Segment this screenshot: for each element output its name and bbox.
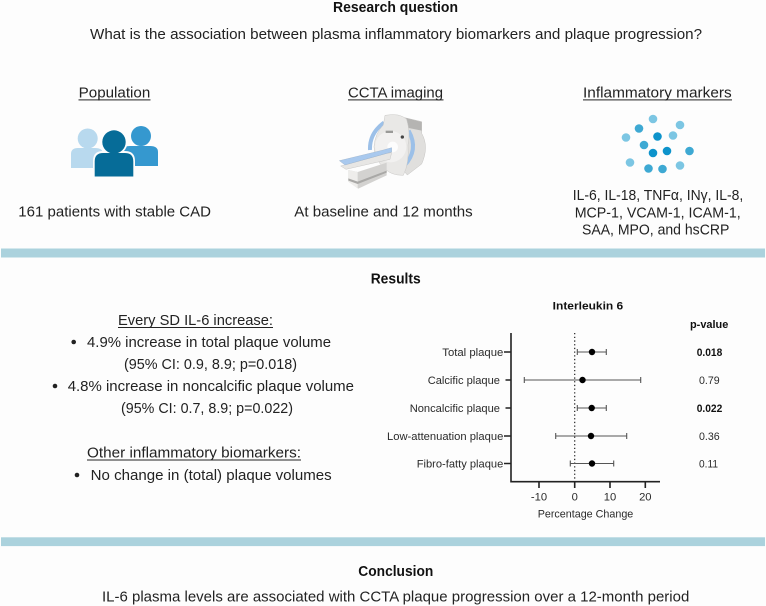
heading: other biomarkers: Other inflammatory biomarkers: xyxy=(87,444,301,462)
row labels: Noncalcific plaque xyxy=(410,403,500,415)
row labels: Calcific plaque xyxy=(428,375,500,387)
p-values: 0.36 xyxy=(699,431,720,443)
icon: molecules xyxy=(622,115,694,173)
zero reference line xyxy=(574,333,576,481)
text: timing: At baseline and 12 months xyxy=(294,204,473,221)
bullet: noncalcific plaque: 4.8% increase in noncalcific plaque volume xyxy=(68,378,354,395)
bullet: no change: No change in (total) plaque volumes xyxy=(91,467,332,484)
text: patients: 161 patients with stable CAD xyxy=(18,204,211,221)
heading: results: Results xyxy=(371,271,421,287)
p-values: 0.11 xyxy=(699,459,718,471)
axes xyxy=(504,333,660,488)
heading: every SD increase: Every SD IL-6 increase: xyxy=(118,312,273,329)
text: conclusion: IL-6 plasma levels are associated with CCTA plaque progression over a 12-month period xyxy=(102,589,689,606)
text: marker list xyxy=(573,187,743,238)
heading: conclusion: Conclusion xyxy=(358,564,433,580)
row labels: Low-attenuation plaque xyxy=(387,431,503,443)
p-values: 0.79 xyxy=(699,375,720,387)
heading: CCTA imaging: CCTA imaging xyxy=(348,85,443,102)
row labels xyxy=(387,347,503,471)
row labels: Total plaque xyxy=(442,347,503,359)
panel: results text xyxy=(53,312,354,484)
text: marker list: MCP-1, VCAM-1, ICAM-1, xyxy=(575,204,741,221)
heading: population: Population xyxy=(79,85,150,102)
panel: CCTA imaging xyxy=(294,85,473,221)
p-values: 0.022 xyxy=(697,403,722,415)
p-values: 0.018 xyxy=(697,347,722,359)
p-values: p-value xyxy=(690,319,728,331)
p-values xyxy=(690,319,728,471)
panel: inflammatory markers xyxy=(573,85,743,238)
point estimates xyxy=(579,349,595,467)
text: marker list: IL-6, IL-18, TNFα, INγ, IL-8, xyxy=(573,187,743,204)
x axis tick labels: 20 xyxy=(639,492,652,504)
chart title: Interleukin 6 xyxy=(553,300,623,312)
bullet: noncalcific plaque xyxy=(53,378,354,417)
heading: inflammatory markers: Inflammatory markers xyxy=(583,85,732,102)
heading: research question: Research question xyxy=(333,0,458,16)
x axis tick labels: 10 xyxy=(604,492,616,504)
bullet: total plaque: (95% CI: 0.9, 8.9; p=0.018) xyxy=(124,356,297,373)
x axis tick labels xyxy=(531,492,652,504)
icon: people xyxy=(71,126,158,178)
forest plot xyxy=(387,300,728,521)
x axis tick labels: -10 xyxy=(531,492,547,504)
divider bar xyxy=(1,248,765,258)
bullet: total plaque xyxy=(71,334,331,373)
x axis title: Percentage Change xyxy=(538,509,633,521)
text: question: What is the association between plasma inflammatory biomarkers and plaque progression? xyxy=(90,26,702,43)
icon: CT scanner xyxy=(339,115,425,189)
bullet: total plaque: 4.9% increase in total plaque volume xyxy=(87,334,331,351)
panel: population xyxy=(18,85,211,221)
divider bar xyxy=(1,537,765,546)
text: marker list: SAA, MPO, and hsCRP xyxy=(582,221,729,238)
error bars xyxy=(524,349,641,466)
row labels: Fibro-fatty plaque xyxy=(417,459,503,471)
bullet: noncalcific plaque: (95% CI: 0.7, 8.9; p=0.022) xyxy=(121,400,293,417)
x axis tick labels: 0 xyxy=(572,492,578,504)
